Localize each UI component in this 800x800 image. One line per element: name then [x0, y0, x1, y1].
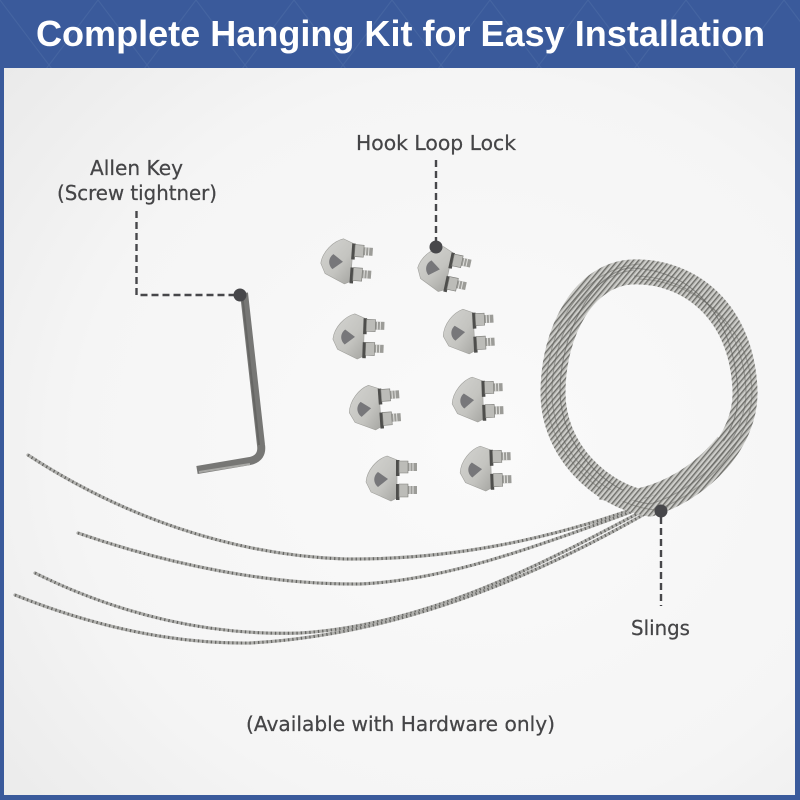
allen key label: Allen Key: [90, 156, 183, 180]
clip 2: [414, 242, 473, 297]
slings: loose wire ends: [15, 455, 655, 643]
callout: slings: [631, 504, 690, 640]
allen key label: [57, 156, 217, 205]
clip 8: [459, 445, 512, 492]
clip 3: [332, 313, 385, 360]
allen key marker dot: [234, 288, 246, 302]
clip 5: [348, 383, 402, 432]
clip 7: [366, 456, 417, 501]
callout: hook loop lock: [356, 131, 516, 254]
title: Complete Hanging Kit for Easy Installation: [36, 13, 765, 54]
allen key label: (Screw tightner): [57, 181, 217, 205]
clip 4: [442, 308, 495, 355]
callout: allen key: [57, 156, 246, 302]
availability note: (Available with Hardware only): [246, 712, 555, 736]
hook loop lock label: Hook Loop Lock: [356, 131, 516, 155]
hook loop lock leader line: [435, 160, 437, 246]
clip 6: [451, 376, 504, 423]
slings: coiled cable: [546, 264, 752, 510]
clip 1: [319, 237, 373, 286]
allen key: [197, 293, 261, 472]
hook loop locks (8 wire rope clips): [319, 237, 512, 501]
hook loop lock marker dot: [430, 240, 442, 254]
slings marker dot: [654, 504, 668, 518]
slings label: Slings: [631, 616, 690, 640]
slings leader line: [660, 517, 662, 606]
allen key leader line: [136, 211, 240, 295]
